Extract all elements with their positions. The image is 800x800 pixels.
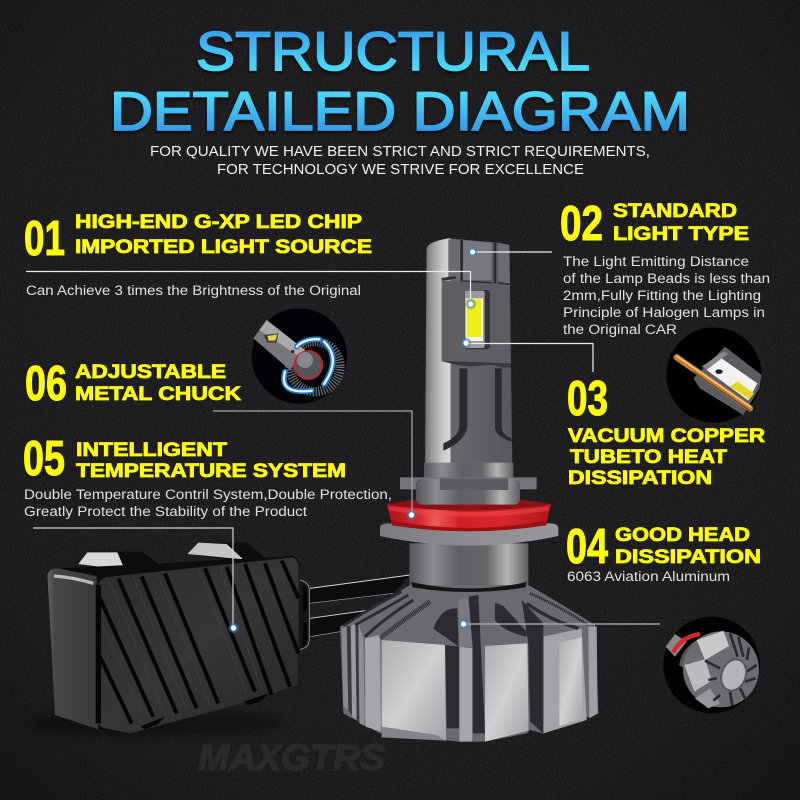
- control box: [30, 543, 410, 737]
- item 01: HIGH-END G-XP LED CHIP: [75, 211, 362, 233]
- title: [110, 20, 690, 142]
- callout line 01: [26, 272, 477, 310]
- item 04: GOOD HEAD: [615, 524, 750, 546]
- item 04: [566, 520, 761, 584]
- callout line 05: [33, 528, 240, 634]
- item 04: 6063 Aviation Aluminum: [567, 569, 730, 584]
- LED chip: [464, 290, 490, 349]
- lit fin panels: [382, 597, 529, 742]
- inset: copper tube: [666, 327, 762, 423]
- title: STRUCTURAL: [196, 20, 590, 82]
- item 03: 03: [567, 372, 608, 426]
- inset: adjustable chuck: [252, 308, 347, 404]
- bulb heat sink: [340, 523, 598, 742]
- radial fin grooves: [343, 592, 588, 638]
- item 02: [560, 197, 770, 337]
- subtitle: [150, 144, 650, 178]
- wires: [300, 575, 410, 649]
- title: DETAILED DIAGRAM: [110, 80, 690, 142]
- rotation arrows: [284, 339, 333, 391]
- item 06: 06: [25, 357, 67, 411]
- callout line 06: [213, 411, 418, 521]
- item 02: of the Lamp Beads is less than: [563, 271, 770, 286]
- item 03: TUBETO HEAT: [570, 446, 727, 468]
- callout line 04: [458, 618, 660, 630]
- bulb upper body: [400, 238, 537, 505]
- diagonal grooves: [98, 561, 299, 723]
- item 06: ADJUSTABLE: [75, 361, 226, 383]
- item 02: the Original CAR: [563, 322, 677, 337]
- item 02: STANDARD: [613, 200, 737, 222]
- item 01: 01: [24, 212, 65, 266]
- item 02: LIGHT TYPE: [613, 223, 749, 245]
- item 05: INTELLIGENT: [76, 439, 227, 461]
- inset: heat sink: [663, 617, 760, 713]
- subtitle: FOR TECHNOLOGY WE STRIVE FOR EXCELLENCE: [217, 162, 584, 178]
- item 01: IMPORTED LIGHT SOURCE: [75, 236, 372, 258]
- dark recesses: [433, 595, 543, 733]
- red ring back: [387, 497, 551, 520]
- callout line 02: [466, 246, 552, 258]
- subtitle: FOR QUALITY WE HAVE BEEN STRICT AND STRICT REQUIREMENTS,: [150, 144, 650, 160]
- item 05: [23, 432, 392, 519]
- item 06: METAL CHUCK: [75, 383, 241, 405]
- item 01: [24, 211, 372, 298]
- collar: [424, 463, 513, 479]
- item 02: 02: [560, 197, 603, 251]
- clips: [78, 543, 268, 573]
- side fins: [342, 623, 598, 733]
- item 05: Double Temperature Contril System,Double Protection,: [24, 487, 392, 502]
- item 03: [567, 372, 765, 489]
- item 01: Can Achieve 3 times the Brightness of the Original: [26, 283, 361, 298]
- red ring front: [387, 505, 551, 531]
- lower flange: [380, 523, 558, 545]
- item 05: TEMPERATURE SYSTEM: [76, 460, 346, 482]
- item 06: [25, 357, 241, 411]
- item 03: VACUUM COPPER: [568, 425, 765, 447]
- item 04: DISSIPATION: [615, 546, 761, 568]
- item 02: Principle of Halogen Lamps in: [563, 305, 765, 320]
- watermark: MAXGTRS: [198, 737, 385, 778]
- item 03: DISSIPATION: [568, 467, 712, 489]
- item 05: Greatly Protect the Stability of the Product: [24, 504, 307, 519]
- item 04: 04: [566, 520, 608, 574]
- callout line 03: [460, 337, 593, 372]
- item 02: The Light Emitting Distance: [563, 254, 749, 269]
- item 02: 2mm,Fully Fitting the Lighting: [563, 288, 761, 303]
- cylinder neck: [409, 543, 528, 585]
- item 05: 05: [23, 432, 65, 486]
